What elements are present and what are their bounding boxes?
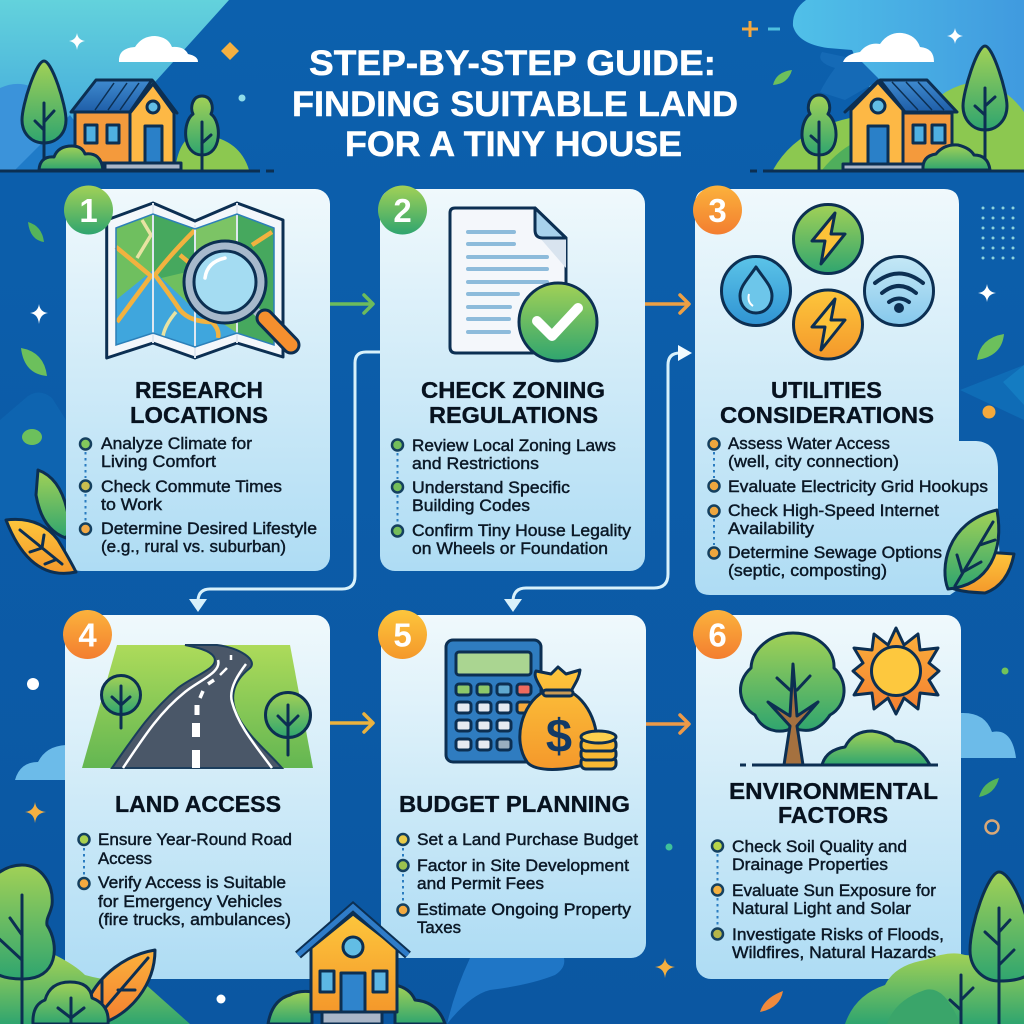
heading xyxy=(720,377,934,428)
hills xyxy=(773,118,910,170)
panel: step 3 utilities considerations xyxy=(693,186,1014,595)
badge: 5: 5 xyxy=(393,616,412,654)
badge: 4 xyxy=(63,610,112,659)
icon: calculator and money bag: $ xyxy=(546,709,572,762)
house body xyxy=(71,80,181,170)
bullet list xyxy=(392,436,632,558)
bullet list: Understand Specific xyxy=(412,478,571,497)
electricity orange xyxy=(794,290,862,359)
badge: 2: 2 xyxy=(393,192,412,229)
bullet list: Wildfires, Natural Hazards xyxy=(732,943,936,962)
bullet list: to Work xyxy=(101,495,163,514)
bullet list: Access xyxy=(98,849,152,868)
badge: 6: 6 xyxy=(708,616,727,654)
scene: top left house xyxy=(0,36,274,171)
steps xyxy=(322,1012,382,1024)
bullet list: Living Comfort xyxy=(101,452,216,471)
bullet list: Factor in Site Development xyxy=(417,856,629,875)
arrow: step 5 to step 6 xyxy=(646,715,689,733)
badge: 3 xyxy=(693,186,742,234)
hill xyxy=(0,955,190,1024)
heading: UTILITIES xyxy=(771,377,882,403)
panel: step 5 budget planning xyxy=(378,610,646,958)
heading xyxy=(130,377,268,428)
bush left xyxy=(268,991,312,1024)
arrow: step 1 to step 2 xyxy=(330,295,373,313)
heading xyxy=(421,377,605,428)
bullet list: (septic, composting) xyxy=(728,561,887,580)
electricity green xyxy=(794,204,862,274)
icon: calculator and money bag xyxy=(446,640,616,770)
card background xyxy=(380,189,645,571)
roof xyxy=(298,907,408,955)
bullet list: (e.g., rural vs. suburban) xyxy=(101,537,286,556)
icon: leaves xyxy=(945,510,1014,593)
decoration: top right marks xyxy=(742,21,963,85)
background: bottom centre blob xyxy=(447,958,564,1024)
cloud xyxy=(843,33,934,62)
tree left xyxy=(22,61,66,168)
bullet list: Set a Land Purchase Budget xyxy=(417,830,638,849)
decoration: orange leaf beside card 1 xyxy=(6,519,76,573)
icon: winding road xyxy=(82,645,313,768)
title: STEP-BY-STEP GUIDE: xyxy=(309,44,716,83)
bullet list: Check Soil Quality and xyxy=(732,837,907,856)
background: sky shape top left xyxy=(0,0,229,172)
card background xyxy=(695,189,1000,595)
icon: tree, sun and bush xyxy=(740,628,939,765)
icon: document with check xyxy=(450,208,597,361)
bullet list: and Permit Fees xyxy=(417,874,544,893)
house body xyxy=(843,80,957,170)
large tree xyxy=(0,865,54,1024)
background: right facets xyxy=(960,365,1024,420)
bush xyxy=(923,145,990,170)
wifi xyxy=(864,256,934,326)
badge: 2 xyxy=(378,186,427,234)
water xyxy=(722,256,790,326)
decoration: left side leaves xyxy=(21,222,70,538)
bullet list: Verify Access is Suitable xyxy=(98,873,286,892)
small tree xyxy=(33,982,108,1024)
white dot xyxy=(216,994,226,1004)
windows xyxy=(320,971,334,992)
arrow: step 2 to step 3 xyxy=(645,295,689,313)
heading: CHECK ZONING xyxy=(421,377,605,403)
badge: 1 xyxy=(64,186,113,234)
heading: CONSIDERATIONS xyxy=(720,402,934,428)
heading: BUDGET PLANNING xyxy=(399,791,630,817)
bullet list xyxy=(708,434,988,580)
bullet list: Building Codes xyxy=(412,496,530,515)
tree left xyxy=(802,95,836,170)
icon: map with magnifier xyxy=(107,203,291,358)
connector arrow: step 3 to step 5 xyxy=(504,345,692,612)
bullet list: for Emergency Vehicles xyxy=(98,892,282,911)
ground xyxy=(0,170,274,172)
heading: FACTORS xyxy=(778,802,888,828)
heading: LAND ACCESS xyxy=(115,791,281,817)
cloud xyxy=(119,36,198,62)
badge: 5 xyxy=(378,610,427,659)
decoration: top left sparkles xyxy=(69,33,246,102)
panel: step 1 research locations xyxy=(64,186,330,571)
bullet list: Ensure Year-Round Road xyxy=(98,830,292,849)
hill xyxy=(845,953,1024,1024)
bullet list: Assess Water Access xyxy=(728,434,890,453)
hill xyxy=(175,134,249,170)
small sapling xyxy=(950,975,973,1024)
arrow: step 4 to step 5 xyxy=(330,714,373,732)
tree right xyxy=(186,96,218,170)
door xyxy=(341,973,365,1012)
bullet list: on Wheels or Foundation xyxy=(412,539,608,558)
badge: 6 xyxy=(693,610,742,659)
scene: bottom left foliage xyxy=(0,865,226,1024)
card background xyxy=(66,189,330,571)
decoration: right side xyxy=(655,206,1016,1012)
badge: 4: 4 xyxy=(78,616,97,654)
bullet list: Determine Sewage Options xyxy=(728,543,942,562)
background: mid left hill xyxy=(0,392,66,520)
heading: ENVIRONMENTAL xyxy=(729,778,938,804)
title: FINDING SUITABLE LAND xyxy=(292,85,738,124)
heading xyxy=(729,778,938,828)
bullet list xyxy=(712,837,944,962)
bullet list: Natural Light and Solar xyxy=(732,899,911,918)
heading: RESEARCH xyxy=(135,377,263,403)
ground xyxy=(750,170,1024,172)
panel: step 6 environmental factors xyxy=(693,610,961,979)
bullet list: Evaluate Sun Exposure for xyxy=(732,881,936,900)
bullet list: (well, city connection) xyxy=(728,452,899,471)
bullet list: Evaluate Electricity Grid Hookups xyxy=(728,477,988,496)
bullet list: Check Commute Times xyxy=(101,477,282,496)
dot grid xyxy=(982,206,1014,260)
connector arrow: step 2 to step 4 xyxy=(189,352,380,612)
background: sky shape top right xyxy=(793,0,1024,120)
bullet list: and Restrictions xyxy=(412,454,539,473)
card background xyxy=(65,615,330,979)
orange leaf xyxy=(88,950,155,1024)
badge: 3: 3 xyxy=(708,192,727,229)
scene: bottom right foliage xyxy=(845,872,1024,1024)
heading: LOCATIONS xyxy=(130,402,268,428)
decoration: lower left dots and cloud xyxy=(15,678,66,823)
panel: step 2 check zoning regulations xyxy=(378,186,645,571)
bullet list: Investigate Risks of Floods, xyxy=(732,925,944,944)
badge: 1: 1 xyxy=(79,192,98,229)
tall tree xyxy=(970,872,1024,1024)
bush right xyxy=(395,985,445,1024)
bullet list: Determine Desired Lifestyle xyxy=(101,519,317,538)
bullet list: Drainage Properties xyxy=(732,855,888,874)
panel: step 4 land access xyxy=(63,610,330,979)
bullet list: Estimate Ongoing Property xyxy=(417,900,632,919)
round window xyxy=(343,937,363,957)
bush xyxy=(39,146,103,170)
title xyxy=(292,44,738,164)
bullet list: Check High-Speed Internet xyxy=(728,501,939,520)
bullet list: Taxes xyxy=(417,918,461,937)
card background xyxy=(696,615,961,979)
bullet list: Confirm Tiny House Legality xyxy=(412,521,632,540)
bullet list: (fire trucks, ambulances) xyxy=(98,910,291,929)
card background xyxy=(381,615,646,958)
bullet list xyxy=(78,830,292,929)
title: FOR A TINY HOUSE xyxy=(345,125,682,164)
bullet list xyxy=(398,830,638,937)
scene: top right house xyxy=(750,33,1024,171)
bullet list: Availability xyxy=(728,519,815,538)
scene: bottom centre house xyxy=(268,907,445,1024)
bullet list xyxy=(80,434,317,556)
tree right xyxy=(963,46,1007,165)
house wall xyxy=(311,914,397,1012)
heading: REGULATIONS xyxy=(429,402,598,428)
icon: utilities circles xyxy=(722,204,934,359)
bullet list: Review Local Zoning Laws xyxy=(412,436,616,455)
bullet list: Analyze Climate for xyxy=(101,434,252,453)
